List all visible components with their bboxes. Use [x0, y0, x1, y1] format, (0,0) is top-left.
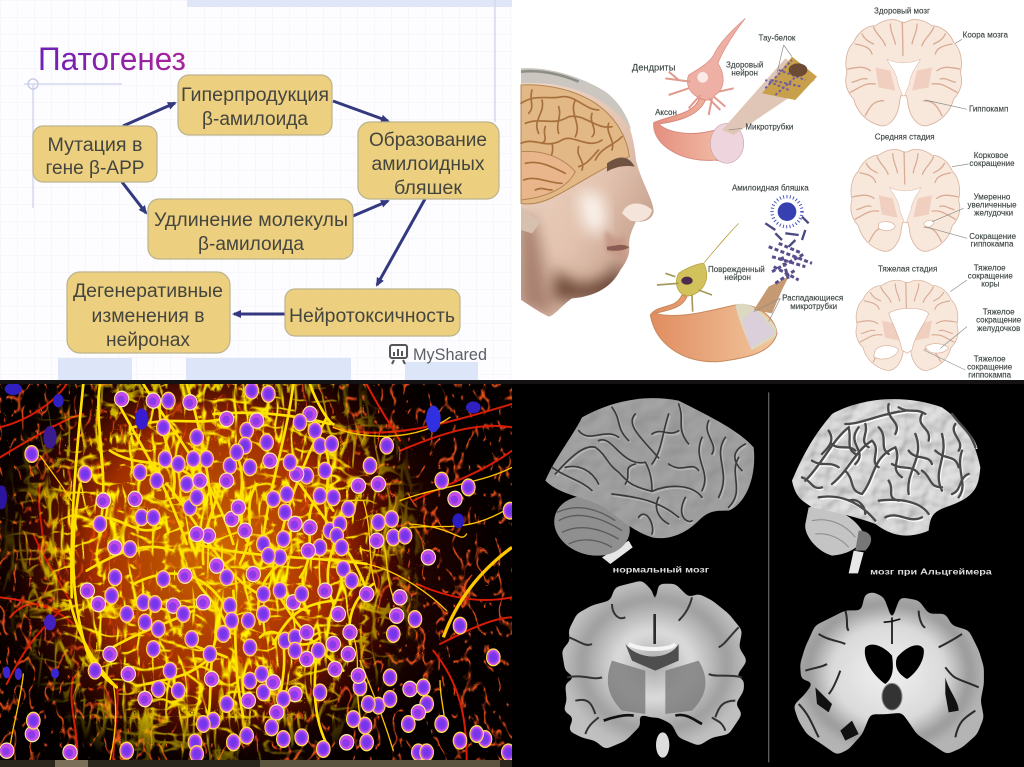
labels: damaged neuron: Поврежденный [708, 265, 765, 274]
brain section: moderate stage: Умеренно [974, 193, 1011, 202]
caption: Alzheimer brain: мозг при Альцгеймера [870, 567, 992, 577]
brain section: moderate stage: Сокращение [969, 232, 1017, 241]
brain section: severe stage: сокращение [968, 271, 1013, 280]
arrows between flowchart boxes [122, 101, 425, 314]
brain section: severe stage: Тяжелое [983, 307, 1015, 316]
labels: healthy neuron: Аксон [655, 108, 677, 117]
labels: damaged neuron: Распадающиеся [782, 294, 843, 303]
labels: damaged neuron: Амилоидная бляшка [732, 183, 809, 192]
box: mutation in beta-APP gene: Мутация в [48, 135, 142, 156]
caption: normal brain: нормальный мозг [613, 564, 710, 574]
brain section: severe stage: желудочков [977, 324, 1020, 333]
brain section: healthy: Коора мозга [963, 31, 1009, 40]
photo: Alzheimer brain coronal section [794, 592, 984, 755]
box: mutation in beta-APP gene [33, 126, 157, 182]
brain section: healthy: Здоровый мозг [874, 6, 930, 15]
brain section: severe stage: сокращение [976, 315, 1022, 324]
divider strip between rows [0, 380, 1024, 384]
labels: healthy neuron: Микротрубки [745, 122, 793, 131]
brain section: severe stage [856, 263, 1022, 379]
brain section: moderate stage [851, 132, 1017, 251]
box: neurotoxicity [285, 289, 460, 336]
labels: damaged neuron: нейрон [724, 273, 751, 282]
panel: pathogenesis flowchart [0, 0, 512, 384]
labels: healthy neuron: Дендриты [632, 62, 676, 72]
box: beta-amyloid molecule elongation [148, 199, 353, 259]
brain section: severe stage: сокращение [967, 362, 1013, 371]
box: degenerative changes in neurons: Дегенеративные [73, 281, 223, 302]
labels: damaged neuron: микротрубки [790, 302, 837, 311]
labels: healthy neuron [632, 34, 796, 131]
box: amyloid plaque formation: Образование [369, 130, 487, 151]
labels: damaged neuron [708, 183, 843, 322]
brain section: moderate stage: гиппокампа [971, 240, 1014, 249]
box: degenerative changes in neurons [67, 272, 230, 353]
box: beta-amyloid overproduction [178, 75, 332, 135]
photo: Alzheimer brain lateral view [792, 399, 980, 573]
photo: normal brain lateral view [545, 398, 754, 564]
box: amyloid plaque formation [358, 122, 499, 199]
box: beta-amyloid overproduction: β-амилоида [202, 109, 308, 130]
brain section: healthy [846, 6, 1009, 126]
box: beta-amyloid molecule elongation: β-амилоида [198, 234, 304, 255]
illustration: damaged neuron with amyloid plaque [650, 183, 843, 362]
box: neurotoxicity: Нейротоксичность [289, 306, 455, 327]
brain section: moderate stage: Корковое [974, 151, 1009, 160]
box: beta-amyloid overproduction: Гиперпродукция [181, 85, 329, 106]
yellow neurites [0, 384, 512, 760]
brain section: severe stage: Тяжелая стадия [878, 264, 937, 273]
panel: fluorescent neuron micrograph [0, 384, 512, 760]
box: mutation in beta-APP gene: гене β-APP [46, 158, 144, 179]
brain section: severe stage: коры [981, 280, 1000, 289]
illustration: healthy neuron with microtubules [632, 18, 817, 163]
divider line [768, 392, 769, 762]
box: degenerative changes in neurons: нейронах [106, 330, 190, 351]
box: beta-amyloid molecule elongation: Удлинение молекулы [154, 210, 348, 231]
brain section: moderate stage: Средняя стадия [875, 132, 935, 141]
heading: Патогенез: Патогенез [38, 41, 186, 77]
illustration: man's head profile with exposed brain [519, 68, 654, 317]
brain section: severe stage: Тяжелое [974, 263, 1006, 272]
photo: normal brain coronal section [562, 581, 747, 758]
red fibre background [0, 384, 512, 760]
brain section: healthy: Гиппокамп [969, 105, 1008, 114]
box: amyloid plaque formation: бляшек [394, 178, 463, 199]
brain section: moderate stage: желудочки [974, 209, 1013, 218]
brain section: severe stage: гиппокампа [968, 370, 1012, 379]
box: amyloid plaque formation: амилоидных [372, 154, 485, 175]
logo: MyShared: MyShared [413, 345, 487, 364]
box: degenerative changes in neurons: изменения в [92, 306, 204, 327]
brain section: moderate stage: увеличенные [967, 201, 1017, 210]
labels: healthy neuron: нейрон [731, 69, 758, 78]
labels: healthy neuron: Здоровый [726, 61, 763, 70]
neuron cell bodies [0, 382, 517, 763]
panel: brain comparison photos [512, 384, 1024, 767]
bottom strip of next image [0, 760, 512, 767]
brain section: severe stage: Тяжелое [974, 354, 1006, 363]
panel: head and neuron illustration [512, 0, 1024, 384]
labels: healthy neuron: Тау-белок [759, 34, 796, 43]
brain section: moderate stage: сокращение [969, 159, 1015, 168]
central orange glow [22, 384, 404, 750]
